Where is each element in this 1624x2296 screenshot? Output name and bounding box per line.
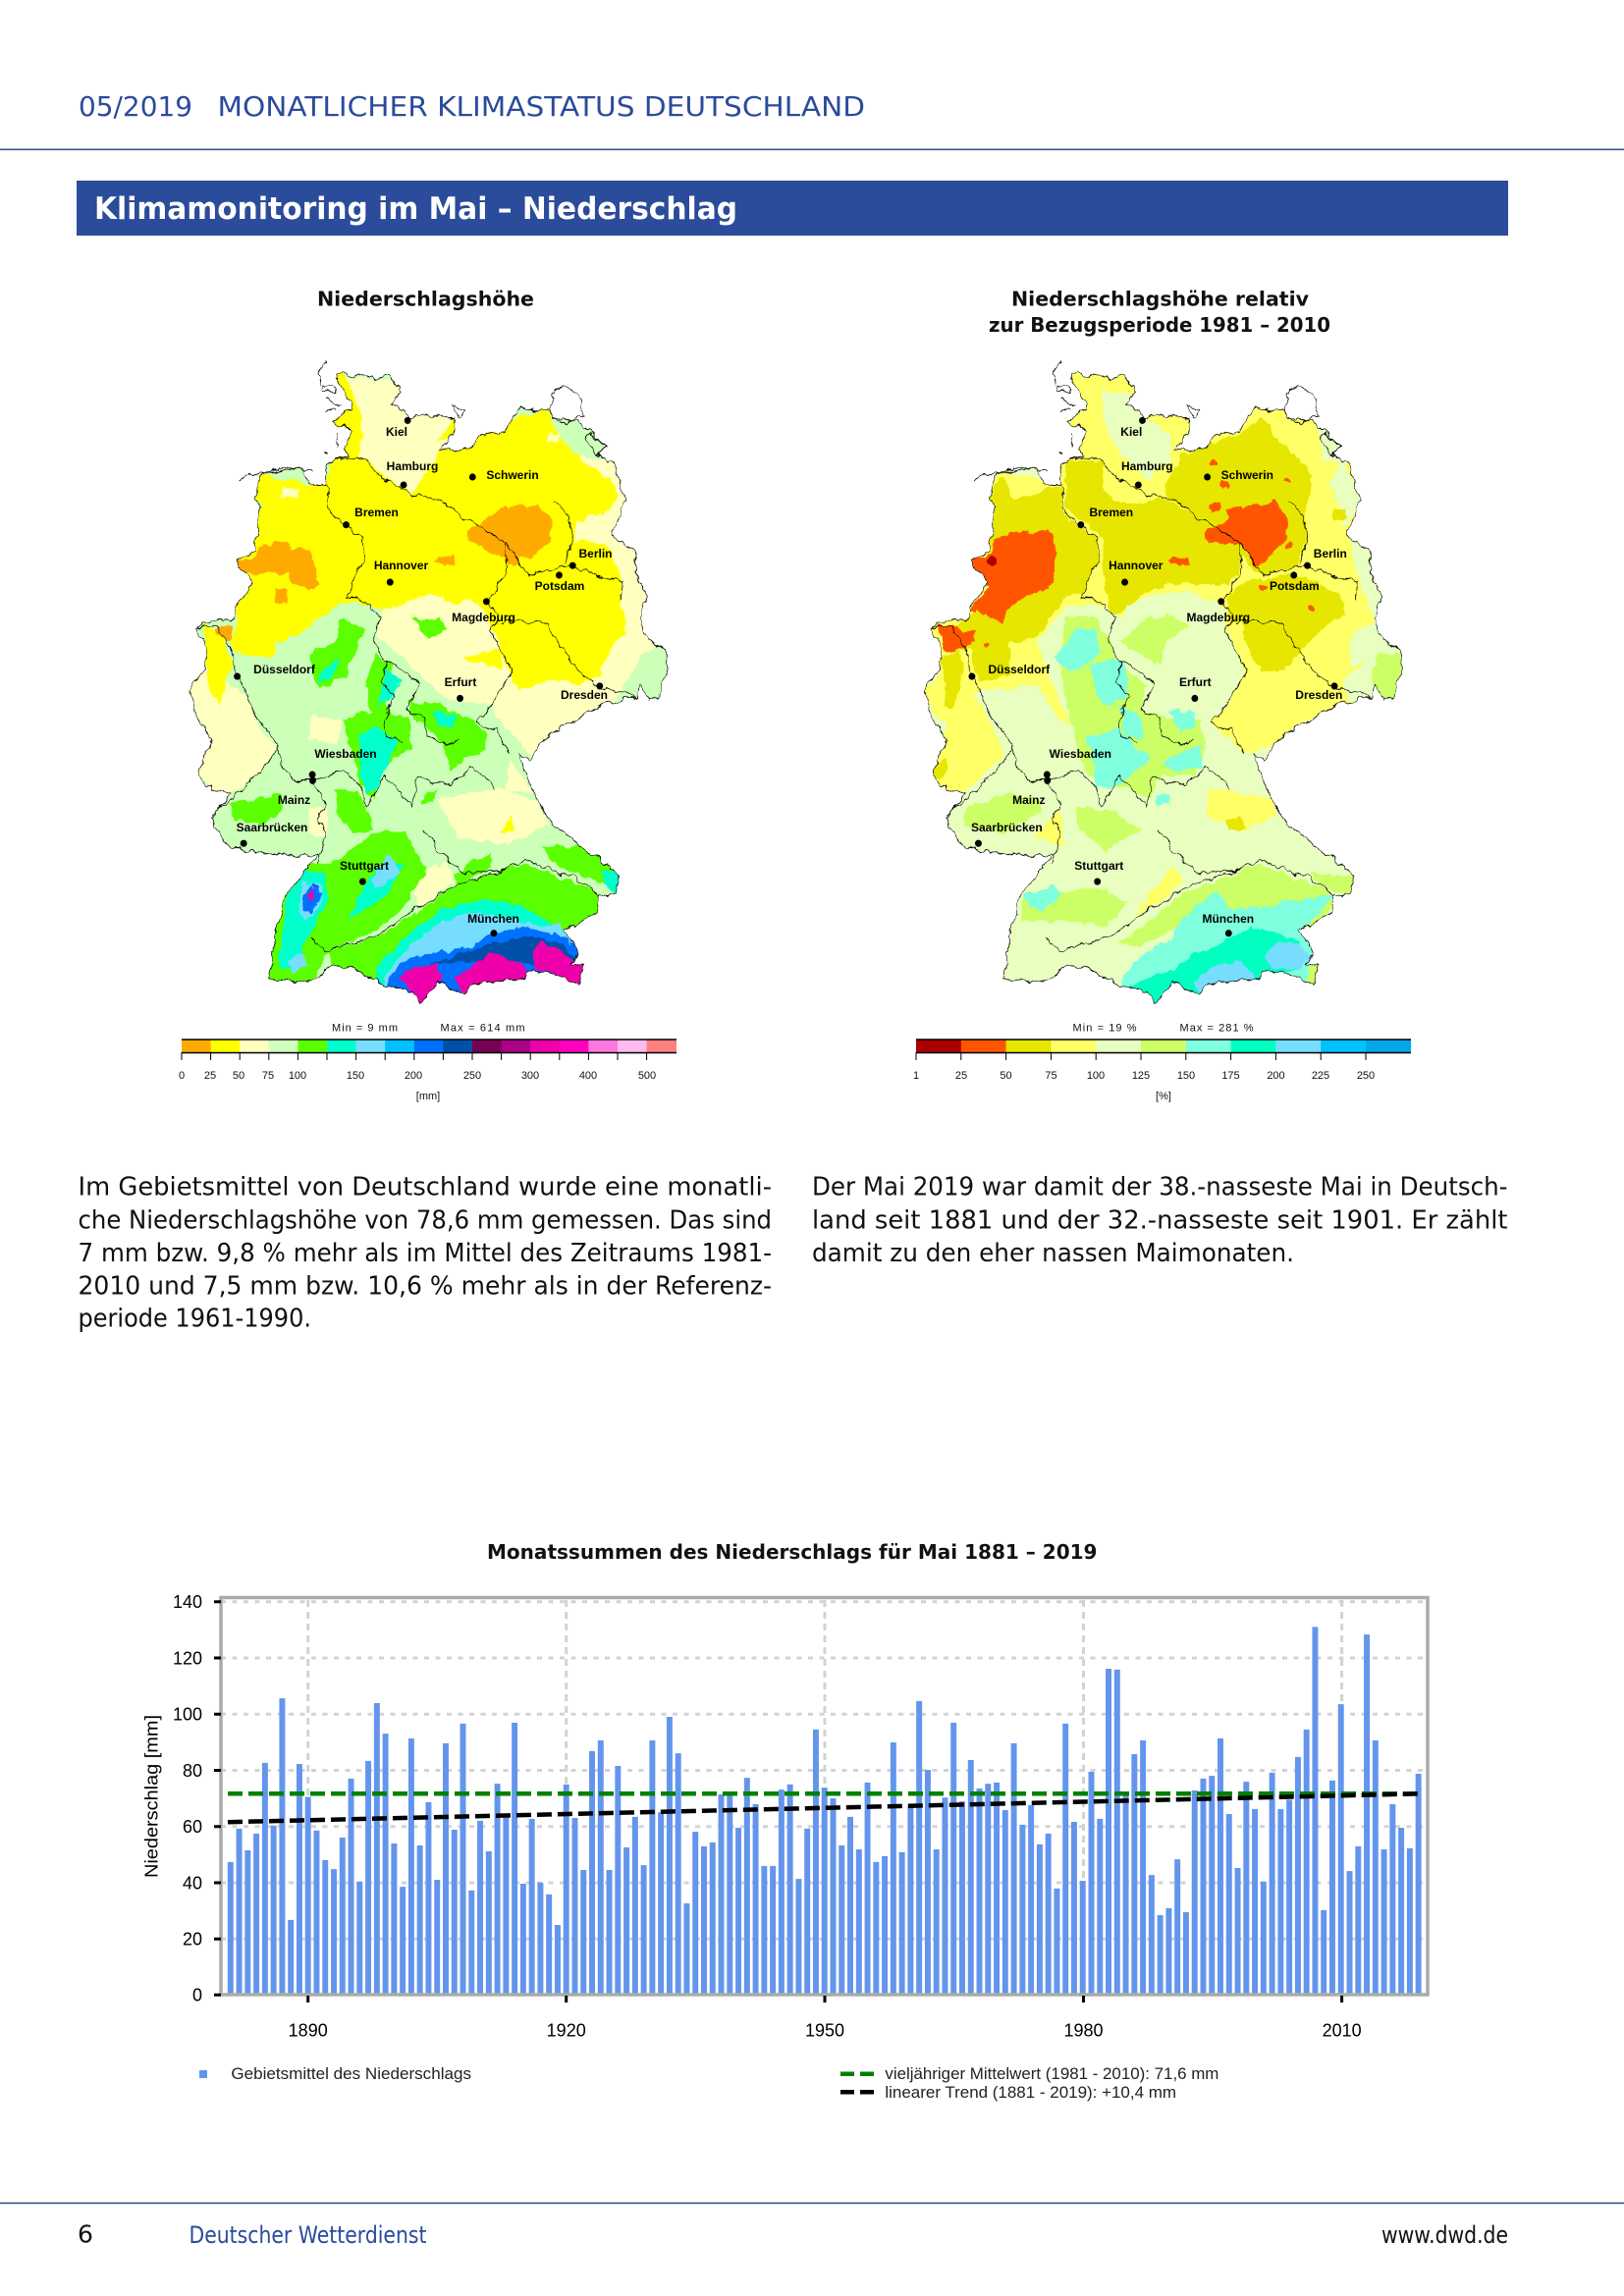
y axis labels: 100 bbox=[173, 1704, 202, 1724]
city labels right: Bremen bbox=[1089, 506, 1133, 519]
y axis labels: 60 bbox=[183, 1817, 202, 1837]
city labels right: Stuttgart bbox=[1074, 859, 1123, 873]
city labels left: Hamburg bbox=[387, 459, 438, 473]
city labels right: Mainz bbox=[1012, 793, 1045, 807]
city labels left: Wiesbaden bbox=[314, 747, 377, 761]
city labels left bbox=[237, 425, 613, 926]
city labels right: Potsdam bbox=[1270, 579, 1320, 593]
x axis labels: 2010 bbox=[1323, 2020, 1362, 2040]
section heading bar bbox=[77, 181, 1508, 236]
footer: Deutscher Wetterdienst bbox=[189, 2221, 426, 2249]
legend: precipitation colour scale: 25 bbox=[204, 1070, 216, 1082]
legend: relative precipitation colour scale: 125 bbox=[1132, 1070, 1150, 1082]
x axis labels bbox=[289, 2020, 1362, 2040]
y axis labels: 140 bbox=[173, 1592, 202, 1612]
chart frame bbox=[221, 1598, 1428, 1995]
chart legend bbox=[199, 2064, 1218, 2102]
legend: precipitation colour scale: 150 bbox=[347, 1070, 364, 1082]
legend: precipitation colour scale: 0 bbox=[179, 1070, 185, 1082]
y axis labels bbox=[173, 1592, 202, 2004]
footer: 6 bbox=[78, 2220, 93, 2248]
legend: precipitation colour scale: 400 bbox=[579, 1070, 597, 1082]
bar chart: monthly precipitation May 1881-2019 bbox=[141, 1592, 1428, 2040]
legend: precipitation colour scale bbox=[179, 1023, 677, 1102]
map title left: Niederschlagshöhe bbox=[317, 287, 534, 310]
legend: precipitation colour scale: 50 bbox=[233, 1070, 244, 1082]
city labels left: Magdeburg bbox=[452, 611, 515, 624]
legend: relative precipitation colour scale: 50 bbox=[1000, 1070, 1012, 1082]
text block right: damit zu den eher nassen Maimonaten. bbox=[812, 1239, 1294, 1268]
city labels left: Schwerin bbox=[486, 468, 539, 482]
city markers bbox=[234, 417, 603, 936]
text block left: periode 1961-1990. bbox=[79, 1305, 311, 1334]
city labels right: Hannover bbox=[1109, 559, 1164, 572]
legend: precipitation colour scale: 500 bbox=[638, 1070, 656, 1082]
y axis labels: 0 bbox=[192, 1985, 202, 2004]
x axis labels: 1920 bbox=[547, 2020, 586, 2040]
footer bbox=[0, 2203, 1624, 2249]
chart legend: linearer Trend (1881 - 2019): +10,4 mm bbox=[885, 2083, 1176, 2102]
legend: relative precipitation colour scale: 100 bbox=[1087, 1070, 1105, 1082]
header: publication title: MONATLICHER KLIMASTATUS DEUTSCHLAND bbox=[218, 90, 865, 123]
legend: relative precipitation colour scale: 250 bbox=[1357, 1070, 1375, 1082]
legend: relative precipitation colour scale: 150 bbox=[1177, 1070, 1195, 1082]
axis ticks bbox=[214, 1602, 1342, 2002]
city labels right: Hamburg bbox=[1121, 459, 1173, 473]
bars bbox=[231, 1627, 1419, 1995]
city labels right: Erfurt bbox=[1179, 675, 1212, 689]
city labels right: München bbox=[1202, 912, 1254, 926]
legend: precipitation colour scale: Max = 614 mm bbox=[440, 1023, 524, 1035]
city labels left: Bremen bbox=[354, 506, 399, 519]
chart legend: Gebietsmittel des Niederschlags bbox=[231, 2064, 471, 2083]
legend: relative precipitation colour scale: 175 bbox=[1221, 1070, 1240, 1082]
city labels left: Saarbrücken bbox=[237, 821, 307, 834]
legend: relative precipitation colour scale: 1 bbox=[913, 1070, 919, 1082]
legend: relative precipitation colour scale: [%] bbox=[1156, 1091, 1171, 1102]
city labels left: Düsseldorf bbox=[253, 663, 316, 676]
legend: relative precipitation colour scale: 25 bbox=[955, 1070, 967, 1082]
city labels right: Dresden bbox=[1295, 688, 1342, 702]
mean line bbox=[228, 1791, 1420, 1796]
city labels right: Berlin bbox=[1314, 547, 1347, 561]
legend: precipitation colour scale: 300 bbox=[521, 1070, 539, 1082]
text block right bbox=[812, 1172, 1508, 1268]
map: absolute precipitation bbox=[189, 360, 668, 1005]
legend: relative precipitation colour scale: Max = 281 % bbox=[1180, 1023, 1254, 1035]
text block left: Im Gebietsmittel von Deutschland wurde eine monatli- bbox=[79, 1172, 772, 1201]
x axis labels: 1890 bbox=[289, 2020, 328, 2040]
legend: relative precipitation colour scale: 225 bbox=[1312, 1070, 1329, 1082]
legend: precipitation colour scale: [mm] bbox=[416, 1091, 440, 1102]
map: relative precipitation bbox=[923, 360, 1403, 1005]
map title right: zur Bezugsperiode 1981 – 2010 bbox=[989, 313, 1330, 337]
x axis labels: 1950 bbox=[805, 2020, 844, 2040]
city labels left: Potsdam bbox=[535, 579, 584, 593]
city labels right: Düsseldorf bbox=[988, 663, 1051, 676]
city labels left: Hannover bbox=[374, 559, 428, 572]
city labels right: Schwerin bbox=[1221, 468, 1273, 482]
text block right: land seit 1881 und der 32.-nasseste seit 1901. Er zählt bbox=[812, 1205, 1508, 1235]
map title right: Niederschlagshöhe relativ bbox=[1011, 287, 1309, 310]
y axis labels: 20 bbox=[183, 1930, 202, 1949]
footer: www.dwd.de bbox=[1381, 2221, 1508, 2249]
y axis labels: 120 bbox=[173, 1649, 202, 1669]
city labels right: Kiel bbox=[1120, 425, 1142, 439]
legend: precipitation colour scale: 100 bbox=[289, 1070, 306, 1082]
text block right: Der Mai 2019 war damit der 38.-nasseste Mai in Deutsch- bbox=[812, 1172, 1508, 1201]
chart legend: vieljähriger Mittelwert (1981 - 2010): 71,6 mm bbox=[885, 2064, 1218, 2083]
y axis labels: 40 bbox=[183, 1873, 202, 1893]
text block left: 7 mm bzw. 9,8 % mehr als im Mittel des Zeitraums 1981- bbox=[79, 1239, 772, 1268]
city labels left: Berlin bbox=[578, 547, 613, 561]
city labels left: Erfurt bbox=[445, 675, 476, 689]
city labels left: Kiel bbox=[386, 425, 407, 439]
legend: relative precipitation colour scale bbox=[913, 1023, 1411, 1102]
city labels right: Saarbrücken bbox=[971, 821, 1043, 834]
map title right bbox=[989, 287, 1330, 337]
legend: precipitation colour scale: 250 bbox=[463, 1070, 481, 1082]
city labels right: Magdeburg bbox=[1186, 611, 1250, 624]
y axis labels: 80 bbox=[183, 1761, 202, 1781]
city labels left: Stuttgart bbox=[340, 859, 389, 873]
legend: relative precipitation colour scale: 75 bbox=[1045, 1070, 1057, 1082]
x axis labels: 1980 bbox=[1063, 2020, 1104, 2040]
city labels right bbox=[971, 425, 1347, 926]
city labels left: Mainz bbox=[278, 793, 310, 807]
legend: precipitation colour scale: 200 bbox=[405, 1070, 422, 1082]
city labels right: Wiesbaden bbox=[1050, 747, 1111, 761]
text block left bbox=[79, 1172, 772, 1334]
legend: relative precipitation colour scale: Min = 19 % bbox=[1072, 1023, 1137, 1035]
header: publication title: 05/2019 bbox=[79, 90, 192, 123]
text block left: 2010 und 7,5 mm bzw. 10,6 % mehr als in der Referenz- bbox=[79, 1271, 772, 1301]
y axis title: Niederschlag [mm] bbox=[141, 1715, 161, 1878]
trend line bbox=[228, 1793, 1420, 1822]
chart title: Monatssummen des Niederschlags für Mai 1881 – 2019 bbox=[487, 1540, 1098, 1564]
section heading bar: Klimamonitoring im Mai – Niederschlag bbox=[94, 191, 737, 227]
city labels left: München bbox=[467, 912, 519, 926]
city labels left: Dresden bbox=[561, 688, 608, 702]
legend: precipitation colour scale: 75 bbox=[262, 1070, 274, 1082]
legend: relative precipitation colour scale: 200 bbox=[1267, 1070, 1285, 1082]
legend: precipitation colour scale: Min = 9 mm bbox=[332, 1023, 398, 1035]
text block left: che Niederschlagshöhe von 78,6 mm gemessen. Das sind bbox=[79, 1205, 772, 1235]
city markers bbox=[968, 417, 1338, 936]
